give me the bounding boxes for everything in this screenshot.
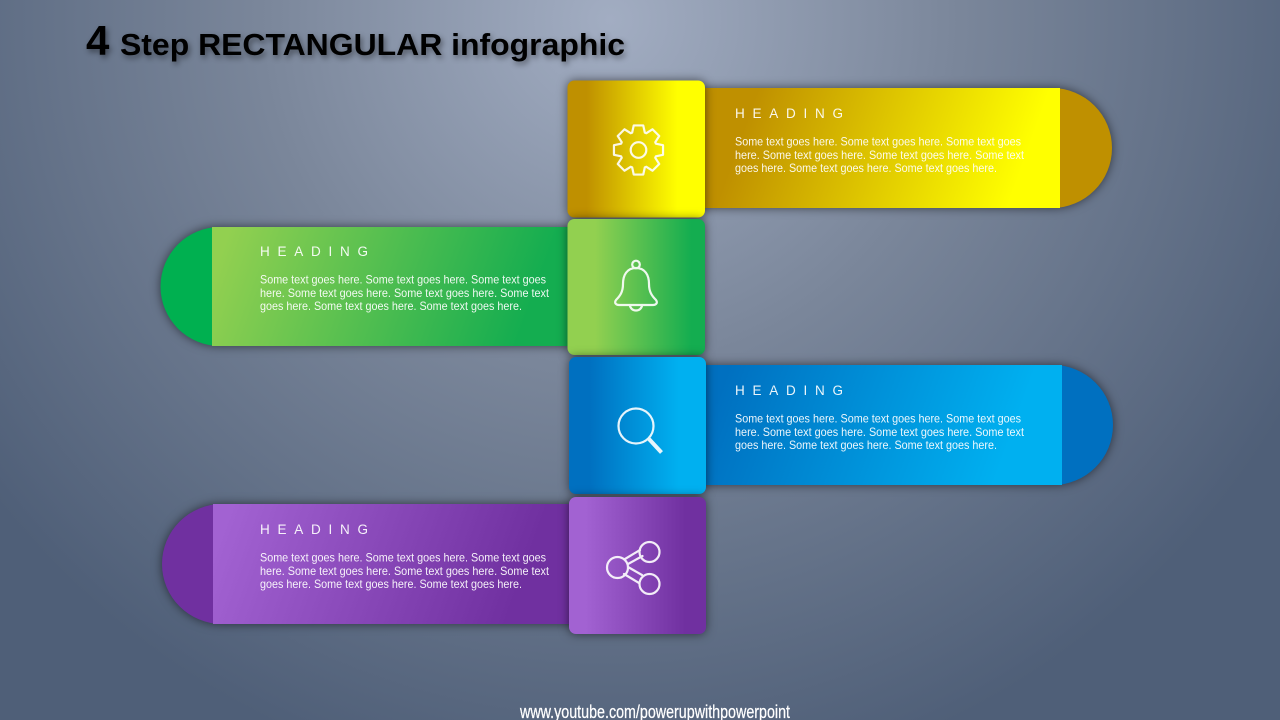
- step 3 bar: blue: [700, 365, 1113, 485]
- step 4 body text: Some text goes here. Some text goes here. Some text goes: [260, 552, 546, 564]
- step 4 body text: goes here. Some text goes here. Some text goes here.: [260, 578, 522, 591]
- step 1 body text: [735, 136, 1025, 175]
- step 2 body text: goes here. Some text goes here. Some text goes here.: [260, 300, 522, 313]
- title: Step RECTANGULAR infographic: [120, 27, 625, 62]
- step 4 heading: HEADING: [260, 522, 368, 537]
- step 4 body text: here. Some text goes here. Some text goes here. Some text: [260, 565, 550, 578]
- step 3 body text: here. Some text goes here. Some text goes here. Some text: [735, 426, 1025, 439]
- step 1 bar: yellow: [700, 88, 1112, 208]
- step 1 icon tile: [568, 80, 705, 218]
- step 2 body text: [260, 274, 550, 313]
- step 2 body text: here. Some text goes here. Some text goes here. Some text: [260, 287, 550, 300]
- icon: magnifier: [618, 408, 662, 452]
- step 2 bar: green: [161, 227, 572, 346]
- icon: gear: [614, 125, 663, 175]
- step 1 body text: Some text goes here. Some text goes here. Some text goes: [735, 136, 1021, 148]
- step 3 heading: HEADING: [735, 383, 843, 398]
- title: [86, 17, 625, 64]
- step 3 body text: [735, 412, 1025, 452]
- title: 4: [86, 17, 110, 64]
- step 3 body text: goes here. Some text goes here. Some text goes here.: [735, 439, 997, 452]
- icon: bell: [615, 261, 657, 310]
- step 2 icon tile: [568, 219, 705, 355]
- step 4 body text: [260, 552, 550, 591]
- step 2 body text: Some text goes here. Some text goes here. Some text goes: [260, 274, 546, 286]
- step 4 bar: purple: [162, 504, 574, 624]
- step 4 icon tile: [569, 497, 706, 634]
- step 1 body text: goes here. Some text goes here. Some text goes here.: [735, 162, 997, 175]
- icon: share: [607, 542, 660, 594]
- step 1 body text: here. Some text goes here. Some text goes here. Some text: [735, 149, 1025, 162]
- step 3 icon tile: [569, 357, 706, 494]
- step 1 heading: HEADING: [735, 106, 843, 121]
- step 3 body text: Some text goes here. Some text goes here. Some text goes: [735, 412, 1021, 426]
- step 2 heading: HEADING: [260, 244, 368, 259]
